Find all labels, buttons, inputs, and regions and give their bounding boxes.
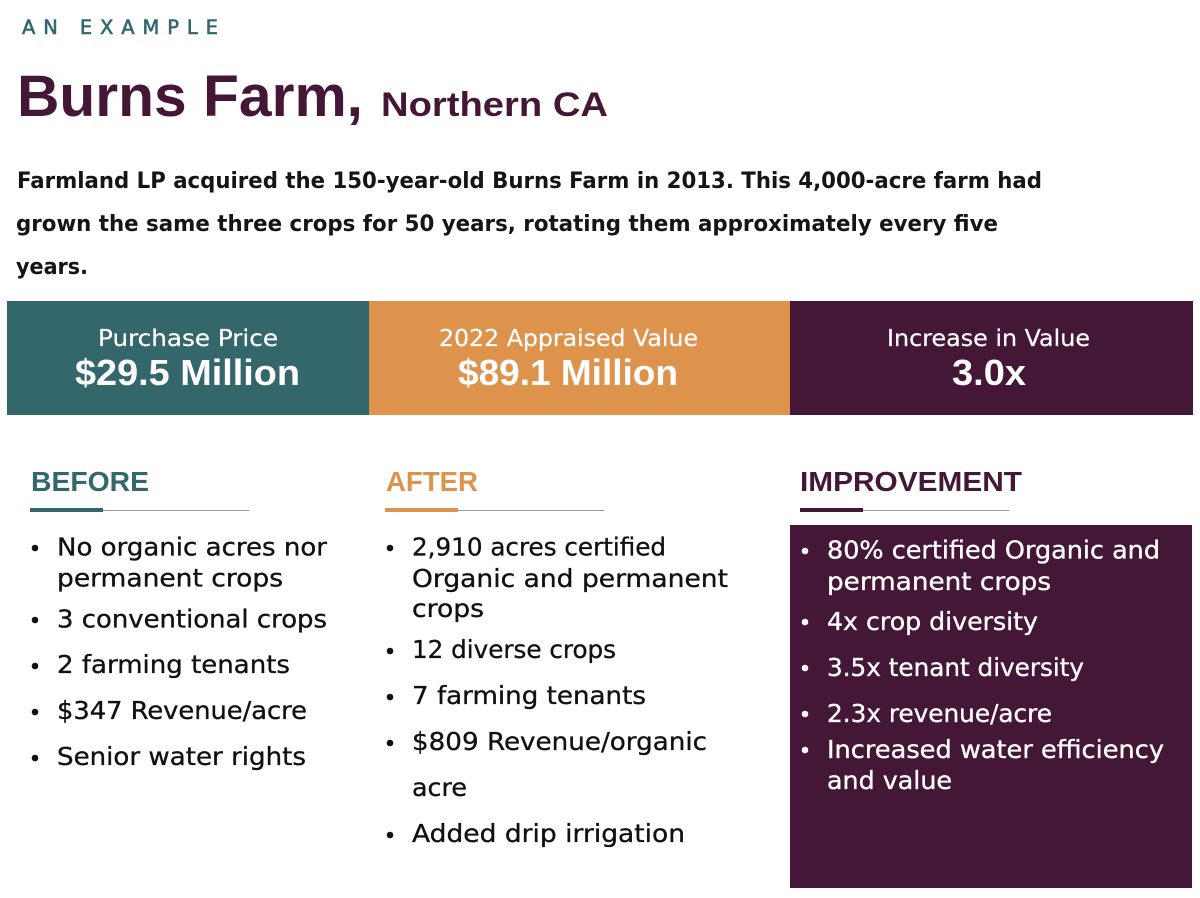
list: after: Organic and permanent: [412, 564, 728, 593]
intro paragraph: years.: [16, 255, 88, 280]
stat: increase in value: 3.0x: [952, 352, 1026, 393]
title: [17, 64, 608, 129]
list: after: Added drip irrigation: [412, 819, 685, 848]
list: after: crops: [412, 594, 484, 623]
heading: improvement: [800, 466, 1022, 512]
eyebrow label: AN EXAMPLE: [22, 16, 218, 39]
list: before: permanent crops: [57, 564, 283, 592]
panel: improvement: [790, 525, 1192, 888]
list: improvement: 3.5x tenant diversity: [827, 653, 1084, 682]
list: after: $809 Revenue/organic: [412, 727, 707, 756]
intro paragraph: grown the same three crops for 50 years, rotating them approximately every five: [16, 212, 998, 237]
list: after: [387, 532, 728, 848]
list: improvement: permanent crops: [827, 567, 1051, 596]
list: before: $347 Revenue/acre: [57, 696, 307, 725]
stat: purchase price: Purchase Price: [98, 326, 278, 352]
list: improvement: 4x crop diversity: [827, 607, 1038, 636]
list: after: 7 farming tenants: [412, 681, 646, 710]
heading: improvement: IMPROVEMENT: [800, 466, 1022, 497]
list: after: 2,910 acres certified: [412, 532, 666, 562]
intro paragraph: [16, 169, 1042, 280]
heading: after: AFTER: [386, 466, 478, 497]
list: before: No organic acres nor: [57, 532, 328, 562]
list: before: 2 farming tenants: [57, 650, 290, 679]
list: before: 3 conventional crops: [57, 604, 327, 634]
stat: purchase price: $29.5 Million: [75, 352, 300, 393]
title: Northern CA: [381, 86, 608, 124]
heading: before: BEFORE: [31, 466, 149, 497]
list: after: 12 diverse crops: [412, 635, 616, 664]
stat: appraised value: $89.1 Million: [458, 352, 678, 393]
intro paragraph: Farmland LP acquired the 150-year-old Burns Farm in 2013. This 4,000-acre farm had: [17, 169, 1042, 194]
list: improvement: 2.3x revenue/acre: [827, 699, 1052, 728]
stat: appraised value: 2022 Appraised Value: [439, 326, 698, 352]
list: after: acre: [412, 773, 467, 802]
list: improvement: and value: [827, 766, 952, 795]
stat: increase in value: [790, 301, 1193, 415]
stat: purchase price: [7, 301, 369, 415]
title: Burns Farm,: [17, 64, 363, 129]
list: improvement: [802, 536, 1164, 795]
stat: increase in value: Increase in Value: [887, 326, 1090, 352]
heading: before: [30, 466, 249, 512]
list: before: Senior water rights: [57, 742, 306, 771]
list: before: [32, 532, 328, 771]
stat: appraised value: [369, 301, 790, 415]
heading: after: [385, 466, 604, 512]
list: improvement: Increased water efficiency: [827, 735, 1164, 764]
list: improvement: 80% certified Organic and: [827, 536, 1160, 564]
